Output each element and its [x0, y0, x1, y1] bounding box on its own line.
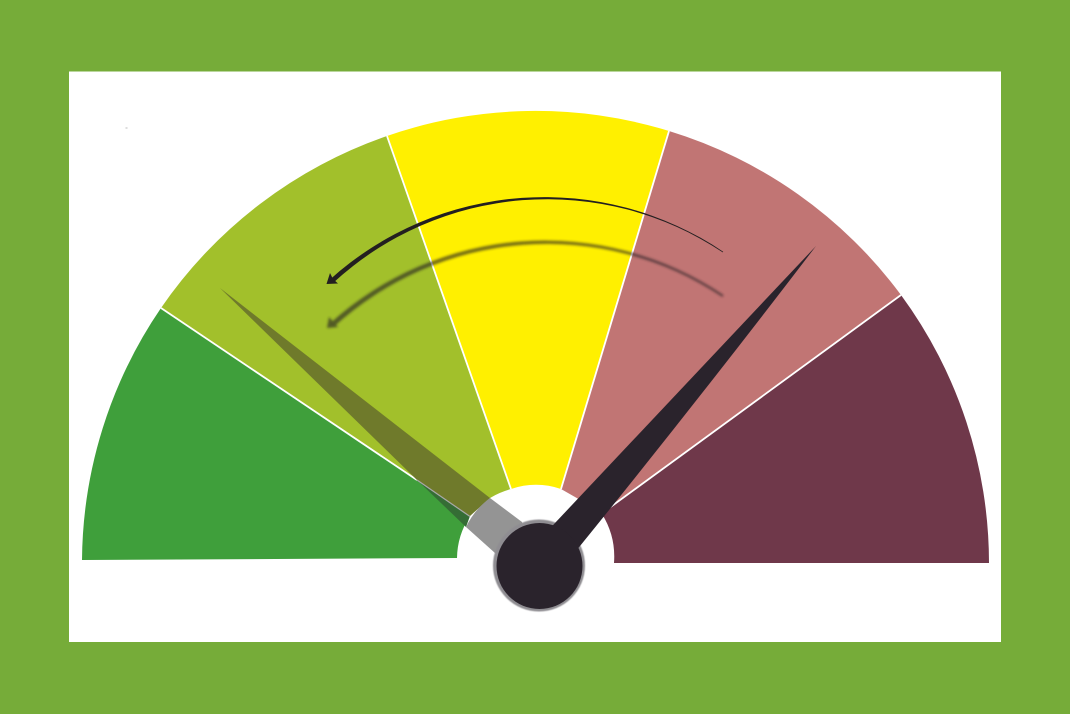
ghost needle blade over green: [417, 480, 470, 527]
ghost needle blade over yellow green: [220, 288, 490, 516]
arrow head: [326, 273, 338, 284]
ghost needle edge line: [417, 480, 470, 516]
blurred arrow shadow: [327, 241, 724, 328]
gauge segment: rose: [561, 131, 901, 513]
grey hub ring: [493, 520, 585, 612]
small speck: [126, 128, 128, 129]
dark hub: [496, 523, 582, 609]
gauge segment: green: [82, 308, 470, 560]
gauge segment: yellow green: [161, 136, 511, 516]
segment dividers: [161, 131, 901, 511]
white panel: [69, 72, 1001, 642]
gauge segment: maroon: [602, 295, 989, 563]
main needle: [535, 246, 816, 570]
curved arrow: [326, 197, 723, 284]
ghost needle: previous position: [220, 288, 530, 560]
ghost needle base: [466, 498, 530, 560]
gauge segment: yellow: [387, 111, 669, 489]
